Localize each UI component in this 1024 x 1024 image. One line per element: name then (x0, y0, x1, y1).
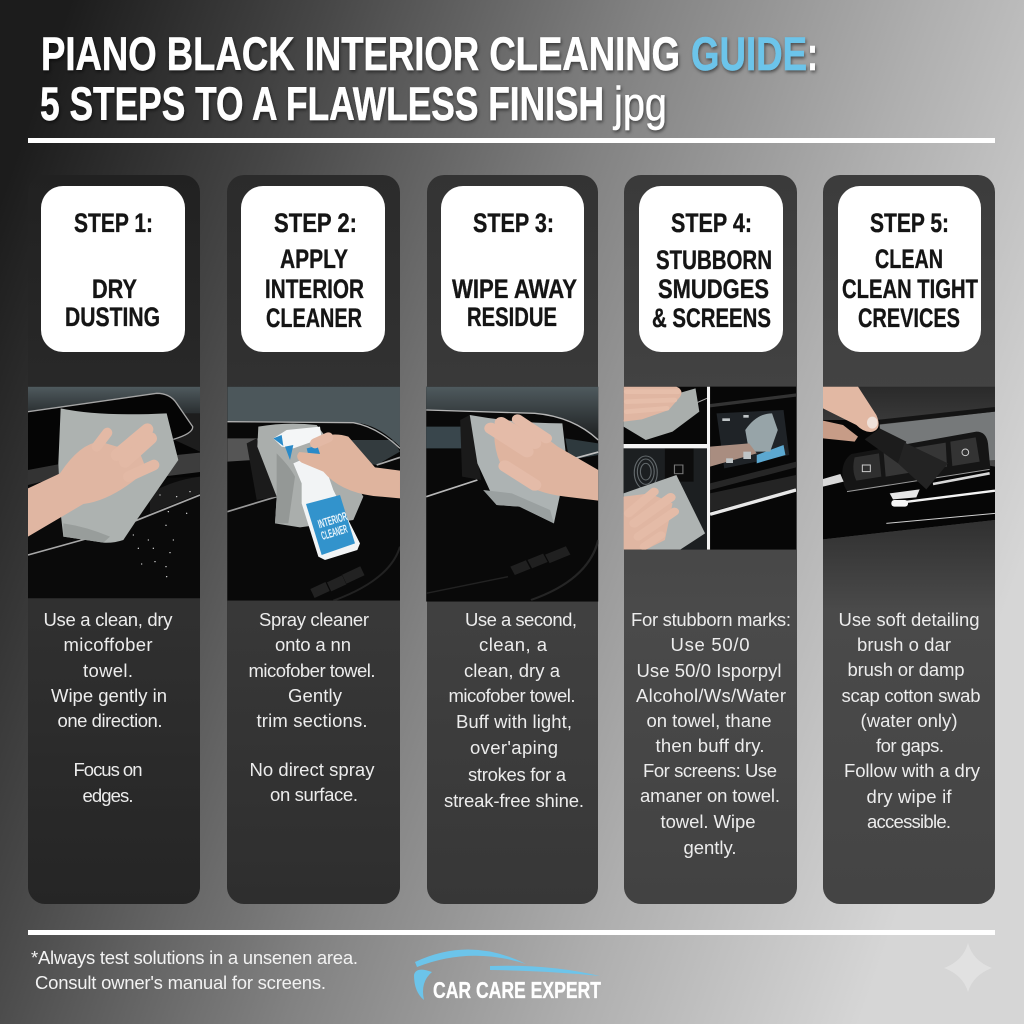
step 3 header card: WIPE AWAY (452, 274, 577, 304)
footer note: *Always test solutions in a unsenen area. (31, 947, 358, 968)
step 3 text: clean, a (479, 634, 548, 655)
step 5 text: Follow with a dry (844, 760, 981, 781)
step 3 text: micofober towel. (448, 685, 576, 706)
photo: spraying cleaner onto towel (227, 387, 400, 601)
step 2 header card (241, 186, 385, 352)
step 1 text: edges. (82, 785, 134, 806)
title: GUIDE (691, 27, 807, 80)
title: jpg (612, 77, 667, 130)
step 2 header card: INTERIOR (265, 274, 364, 304)
step 2 text (248, 609, 376, 805)
sprayer and bottle (273, 427, 360, 560)
step 1 text (44, 609, 173, 806)
step 1 text: Use a clean, dry (44, 609, 173, 630)
photo: buffing with second towel (426, 387, 598, 602)
brush (865, 428, 948, 489)
icon: sparkle star (944, 943, 992, 992)
step 1 header card: DUSTING (65, 302, 160, 332)
step 2 text: micofober towel. (248, 660, 376, 681)
step 5 header card: STEP 5: (870, 208, 949, 238)
step 3 text: strokes for a (468, 764, 567, 785)
photo: brush and cotton swab in crevices (823, 386, 995, 578)
step 5 text: Use soft detailing (838, 609, 980, 630)
step 1 text: one direction. (58, 710, 162, 731)
step 3 text: streak-free shine. (444, 790, 584, 811)
sprayer and bottle: CLEANER (319, 522, 349, 543)
bottom left inset (624, 448, 707, 550)
switch cluster (842, 432, 990, 492)
step 3 text: clean, dry a (464, 660, 561, 681)
step 3 header card (441, 186, 584, 352)
title: : (807, 27, 818, 80)
step 5 text: dry wipe if (866, 786, 952, 807)
step 4 header card: STUBBORN (656, 245, 772, 275)
footer note (31, 947, 358, 993)
step 1 text: micoffober (64, 634, 152, 655)
step 1 header card: DRY (92, 274, 137, 304)
step 4 text: For stubborn marks: (631, 609, 791, 630)
step 4 text: towel. Wipe (660, 811, 756, 832)
step 1 text: Wipe gently in (51, 685, 167, 706)
photo: hand dusting with towel (28, 387, 200, 598)
step 5 header card: CREVICES (858, 303, 960, 333)
title (40, 27, 818, 130)
logo: car care expert: CAR CARE EXPERT (433, 977, 601, 1003)
step 5 text: accessible. (867, 811, 951, 832)
photo collage: towel on trim, fingerprints and touchscreen (624, 387, 796, 550)
panel: step 2 (227, 175, 400, 904)
step 5 text: brush o dar (857, 634, 951, 655)
step 4 text: Use 50/0 Isporpyl (636, 660, 782, 681)
step 4 header card: SMUDGES (658, 274, 769, 304)
step 5 header card: CLEAN TIGHT (842, 274, 978, 304)
logo: car care expert (414, 949, 601, 1003)
step 3 header card: STEP 3: (473, 208, 554, 238)
step 5 header card (838, 186, 981, 352)
top left inset (624, 387, 707, 440)
cotton swab (891, 491, 995, 507)
step 3 text: Buff with light, (456, 711, 572, 732)
panel: step 3 (426, 175, 598, 904)
step 5 text (838, 609, 981, 832)
step 4 text: gently. (684, 837, 736, 858)
step 2 text: Gently (288, 685, 343, 706)
footer note: Consult owner's manual for screens. (35, 972, 326, 993)
step 5 header card: CLEAN (875, 244, 943, 274)
step 2 text: No direct spray (250, 759, 375, 780)
fingers holding the brush (823, 387, 879, 442)
step 1 header card (41, 186, 185, 352)
title: PIANO BLACK INTERIOR CLEANING (41, 27, 680, 80)
step 2 text: on surface. (270, 784, 358, 805)
step 4 header card (639, 186, 783, 352)
step 1 header card: STEP 1: (74, 208, 153, 238)
step 4 text: For screens: Use (643, 760, 777, 781)
step 1 text: Focus on (74, 759, 142, 780)
step 4 header card: STEP 4: (671, 208, 752, 238)
step 4 text: on towel, thane (646, 710, 772, 731)
step 2 header card: APPLY (280, 244, 348, 274)
step 3 text: over'aping (470, 737, 558, 758)
sprayer and bottle: INTERIOR (316, 509, 349, 531)
panel: step 1 (28, 175, 200, 904)
step 5 text: (water only) (860, 710, 958, 731)
step 5 text: brush or damp (848, 659, 964, 680)
step 4 text (631, 609, 791, 858)
step 3 text (444, 609, 584, 811)
step 4 header card: & SCREENS (652, 303, 771, 333)
step 1 text: towel. (83, 660, 133, 681)
step 5 text: scap cotton swab (842, 685, 980, 706)
step 4 text: amaner on towel. (640, 785, 780, 806)
panel: step 5 (823, 175, 995, 904)
touchscreen inset (710, 386, 796, 516)
step 2 text: onto a nn (275, 634, 351, 655)
step 3 text: Use a second, (465, 609, 577, 630)
step 4 text: Use 50/0 (670, 634, 750, 655)
step 2 header card: CLEANER (266, 303, 362, 333)
step 5 text: for gaps. (876, 735, 944, 756)
step 2 text: trim sections. (256, 710, 368, 731)
title: 5 STEPS TO A FLAWLESS FINISH (40, 77, 604, 130)
step 4 text: then buff dry. (656, 735, 764, 756)
step 3 header card: RESIDUE (467, 302, 557, 332)
panel: step 4 (624, 175, 797, 904)
step 2 text: Spray cleaner (259, 609, 369, 630)
step 2 header card: STEP 2: (274, 208, 357, 238)
step 4 text: Alcohol/Ws/Water (636, 685, 786, 706)
